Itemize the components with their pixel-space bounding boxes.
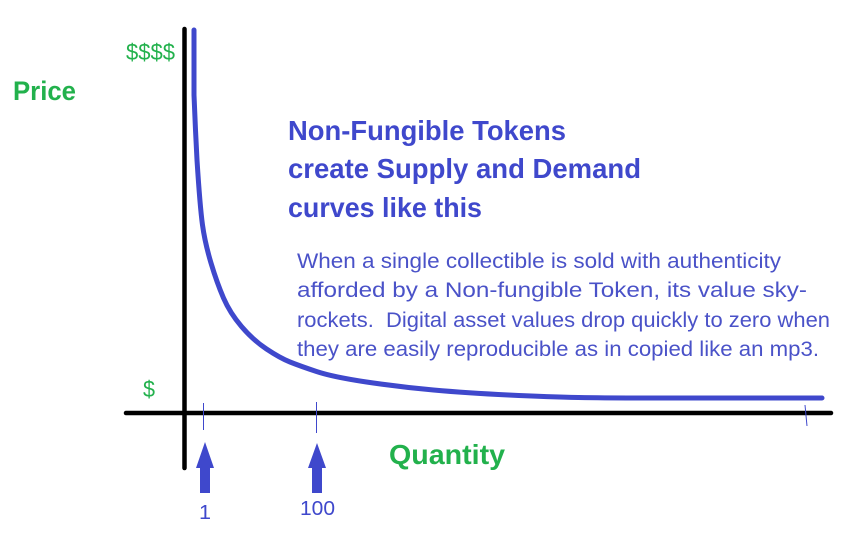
label: 1: 1 [199, 502, 211, 524]
heading: create Supply and Demand [288, 153, 641, 184]
body text: afforded by a Non-fungible Token, its value sky- [297, 279, 807, 302]
body text: rockets. Digital asset values drop quickly to zero when [297, 309, 830, 332]
x axis label: Quantity: Quantity [389, 439, 505, 470]
y axis [182, 29, 187, 468]
arrow: quantity 100 [308, 443, 326, 493]
x axis [126, 411, 831, 415]
body text: they are easily reproducible as in copied like an mp3. [297, 338, 819, 361]
body text [297, 250, 830, 361]
tick: quantity 1 [202, 403, 204, 430]
heading: curves like this [288, 192, 482, 223]
tick: quantity 100 [316, 402, 318, 433]
heading: Non-Fungible Tokens [288, 115, 566, 146]
high price label: $$$$ [126, 39, 175, 65]
demand curve [194, 30, 822, 398]
low price label: $ [143, 376, 155, 402]
heading [288, 115, 641, 223]
body text: When a single collectible is sold with authenticity [297, 250, 782, 273]
label: 100: 100 [300, 498, 335, 520]
arrow: quantity 1 [196, 442, 214, 493]
tick: far end of quantity axis [805, 405, 807, 426]
y axis label: Price: Price [13, 76, 76, 106]
